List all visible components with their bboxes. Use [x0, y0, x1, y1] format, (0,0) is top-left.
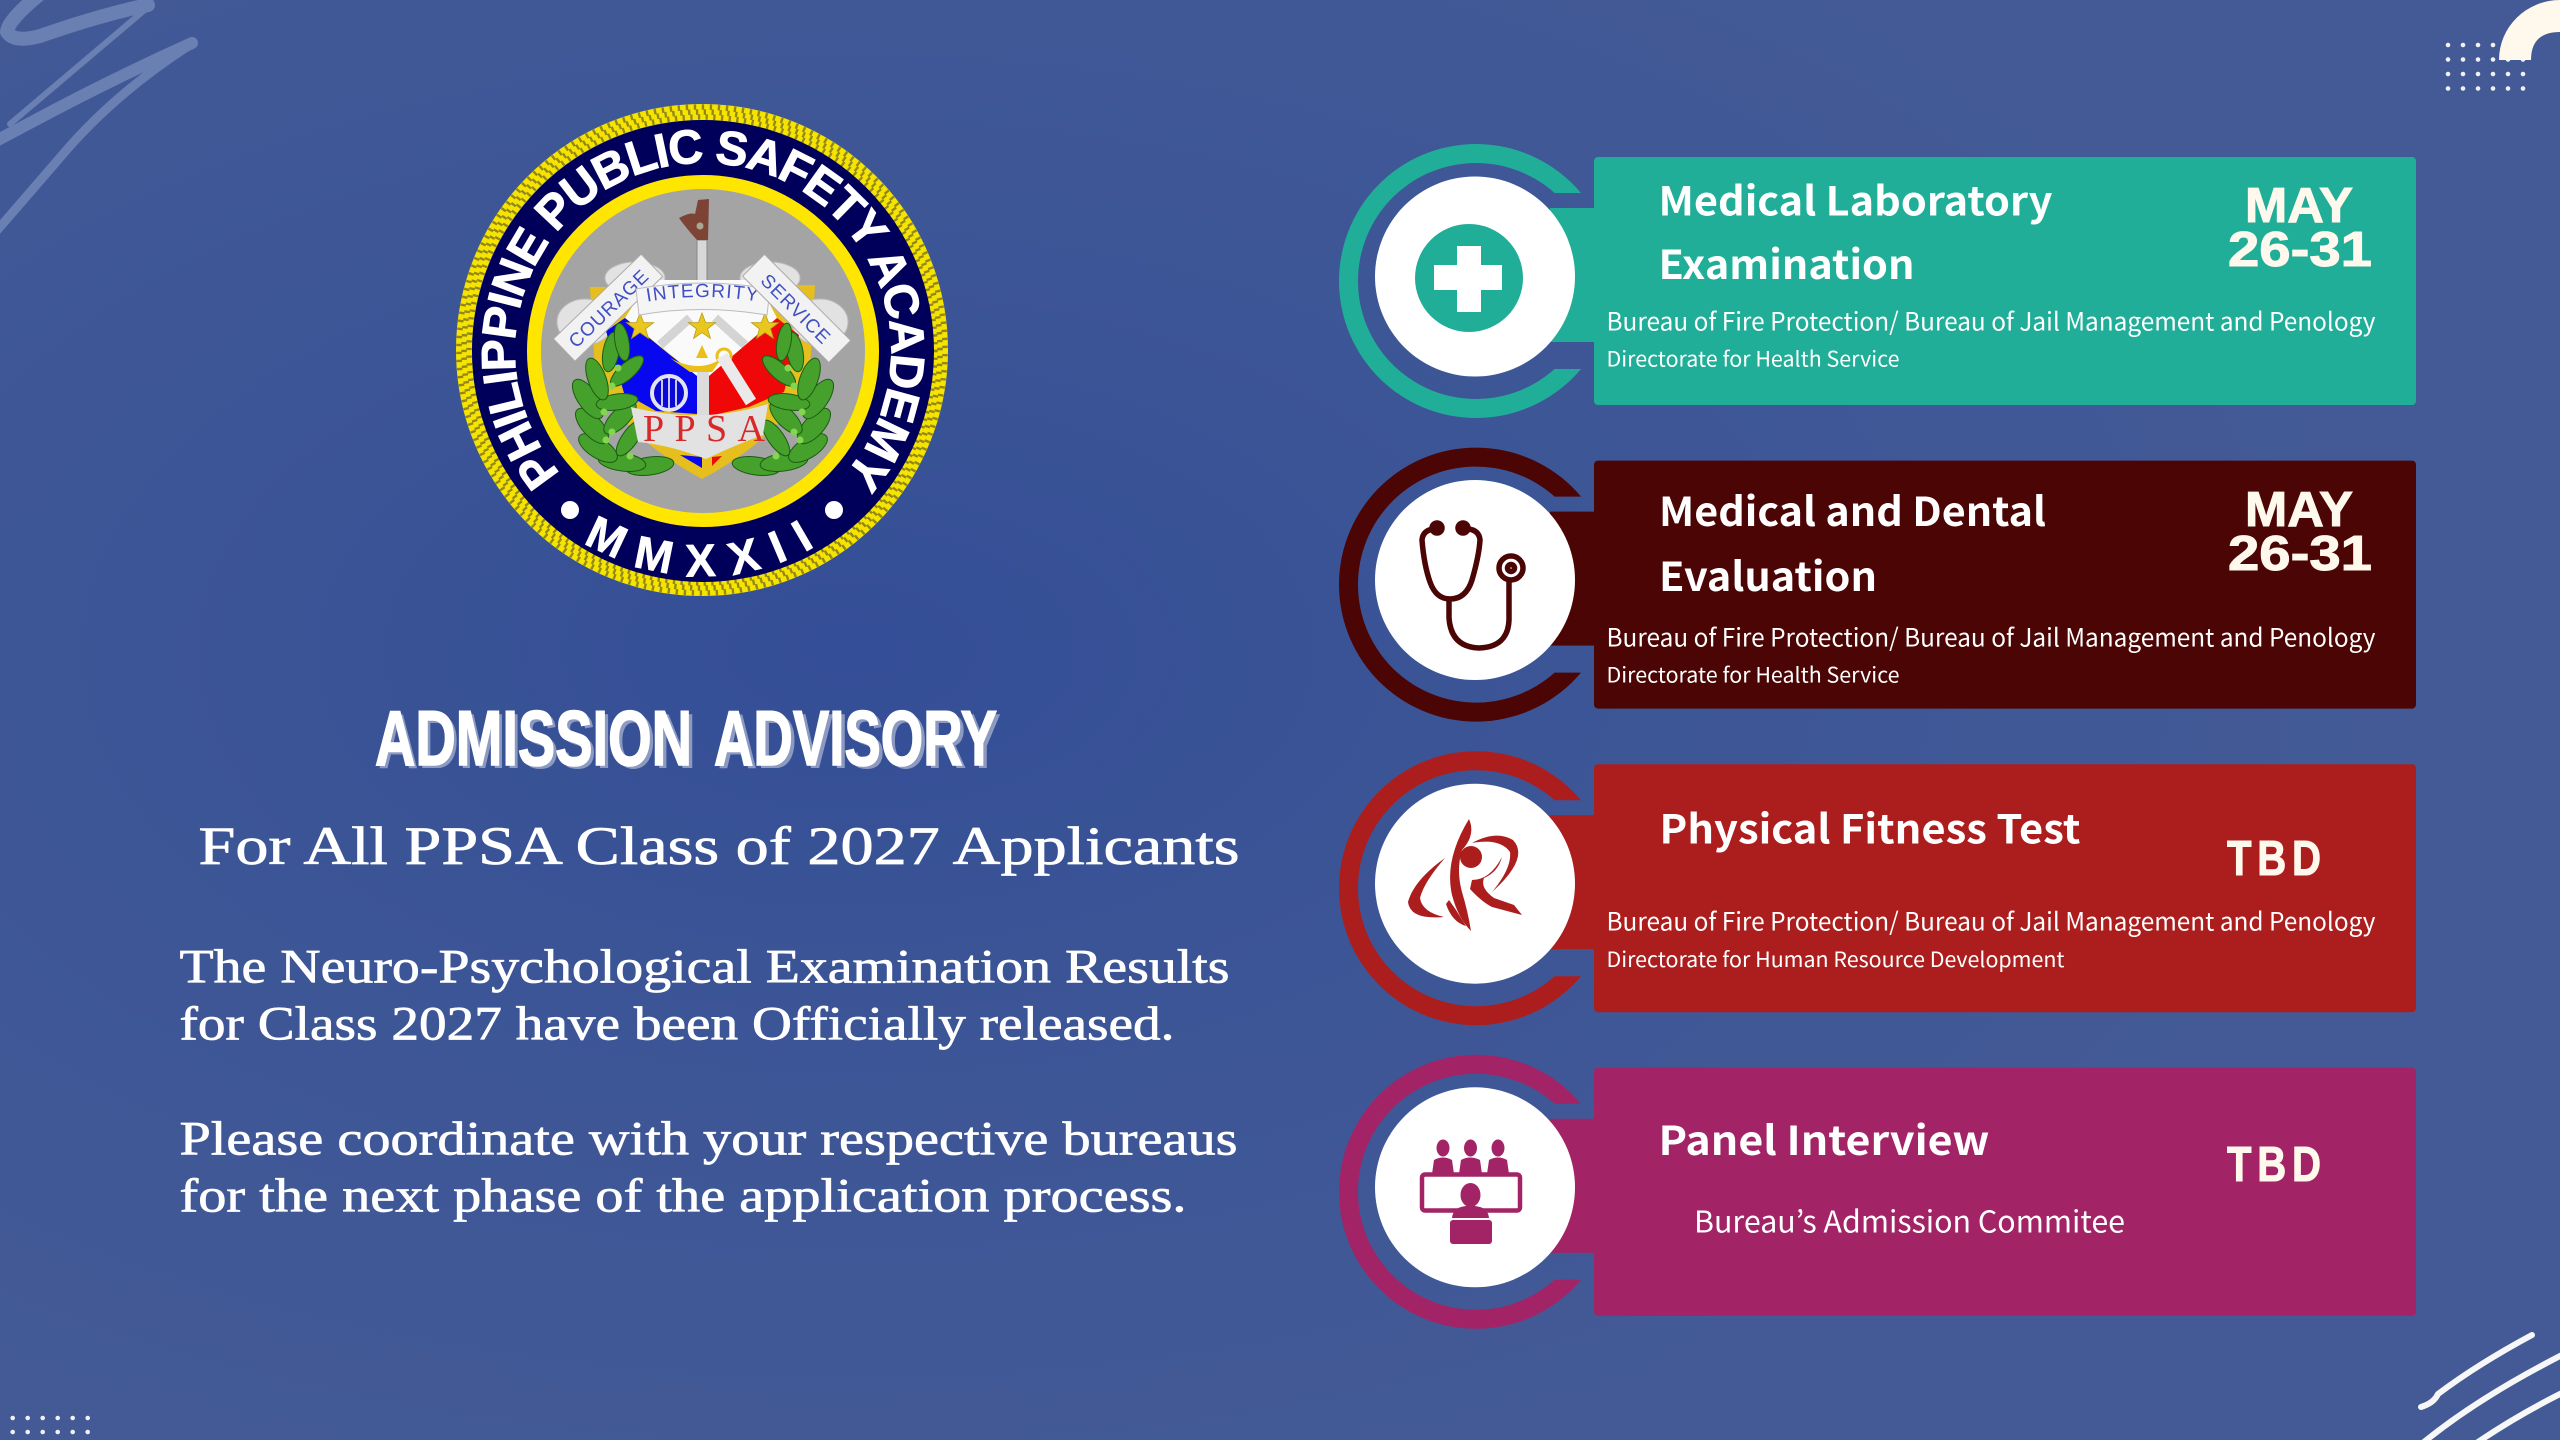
logo: PPSA seal: [456, 104, 948, 596]
icon: stethoscope: [1422, 523, 1523, 648]
heading: admission advisory: ADVISORY: [718, 697, 1001, 785]
date: TBD: [2227, 831, 2327, 886]
icon: gymnast: [1408, 819, 1522, 931]
date: [2228, 179, 2372, 277]
card body: [1550, 461, 2416, 709]
seal bullets: [561, 501, 843, 519]
panel: physical fitness test: [1339, 751, 2416, 1025]
paragraph: next phase: [180, 1112, 1238, 1222]
heading: admission advisory: [375, 694, 1001, 785]
title: Medical and Dental: [1659, 480, 2046, 538]
sword: [697, 240, 707, 290]
title: [1658, 170, 2053, 291]
title: Evaluation: [1659, 545, 1877, 603]
stars: [626, 313, 779, 338]
seal yellow band and grey field: [534, 182, 872, 520]
lamp: [670, 345, 731, 372]
PPSA banner text: PPSA: [643, 408, 766, 450]
date: 26-31: [2228, 527, 2372, 581]
ring: [1339, 144, 1581, 418]
date: 26-31: [2228, 223, 2372, 277]
title: [1659, 480, 2046, 603]
crest: [554, 199, 850, 479]
date: [2228, 483, 2372, 581]
motto ribbon: integrity: INTEGRITY: [646, 284, 757, 302]
white disc: [1375, 480, 1575, 680]
shield backing: [590, 285, 815, 479]
seal top lettering: PHILIPPINE PUBLIC SAFETY ACADEMY: [481, 130, 925, 496]
PPSA banner: [631, 404, 768, 459]
paragraph: next phase: for the next phase of the application process.: [180, 1170, 1186, 1222]
bureaus: Bureau of Fire Protection/ Bureau of Jail Management and Penology: [1606, 902, 2376, 938]
directorate: Directorate for Human Resource Development: [1606, 944, 2065, 974]
bureaus: Bureau of Fire Protection/ Bureau of Jail Management and Penology: [1606, 618, 2376, 654]
diagonal bar: [722, 356, 751, 402]
shield red panel: [709, 318, 799, 416]
title: Examination: [1658, 233, 1914, 291]
decoration: bottom-left dot grid: [13, 1418, 95, 1432]
shield centre bar: [697, 372, 709, 418]
directorate: Directorate for Health Service: [1606, 344, 1900, 374]
icon: medical cross: [1415, 224, 1523, 332]
title: Physical Fitness Test: [1660, 798, 2081, 856]
heading: admission advisory: ADVISORY: [714, 694, 997, 782]
seal bottom lettering: MMXXII: [585, 516, 814, 577]
panel: medical and dental evaluation: [1339, 448, 2416, 722]
motto ribbon: integrity: [636, 282, 769, 316]
heading: admission advisory: ADMISSION: [378, 697, 696, 785]
paragraph: results released: The Neuro-Psychological Examination Results: [180, 940, 1230, 994]
motto ribbon: courage: COURAGE: [565, 266, 654, 352]
paragraph: results released: for Class 2027 have been Officially released.: [180, 998, 1174, 1050]
icon: interview panel: [1422, 1140, 1520, 1244]
shield blue panel: [606, 318, 697, 414]
wreaths: [567, 322, 675, 478]
date: TBD: [2227, 1137, 2327, 1192]
panel: medical laboratory examination: [1339, 144, 2416, 418]
date: MAY: [2245, 483, 2353, 537]
ring: [1339, 1055, 1581, 1329]
motto ribbon: courage: [553, 254, 663, 361]
card body: [1550, 1068, 2416, 1316]
seal rope border: [459, 107, 945, 593]
directorate: Directorate for Health Service: [1606, 660, 1900, 690]
committee: Bureau’s Admission Commitee: [1694, 1198, 2125, 1242]
seal navy ring: [472, 120, 934, 582]
white disc: [1375, 176, 1575, 376]
white disc: [1375, 1087, 1575, 1287]
heading: admission advisory: ADMISSION: [375, 694, 692, 782]
motto ribbon: service: [743, 254, 851, 362]
barred circle: [652, 376, 686, 410]
bureaus: Bureau of Fire Protection/ Bureau of Jail Management and Penology: [1606, 302, 2376, 338]
title: Panel Interview: [1658, 1109, 1990, 1167]
wings: [557, 262, 848, 345]
white disc: [1375, 784, 1575, 984]
decoration: top-right dot grid: [2448, 45, 2530, 88]
panel: panel interview: [1339, 1055, 2416, 1329]
ring: [1339, 448, 1581, 722]
decoration: top-left scribble: [0, 0, 192, 234]
decoration: top-right cream arc: [2499, 0, 2560, 60]
card body: [1550, 157, 2416, 405]
paragraph: next phase: Please coordinate with your respective bureaus: [180, 1112, 1238, 1166]
subheading: For All PPSA Class of 2027 Applicants: [198, 816, 1240, 876]
title: Medical Laboratory: [1658, 170, 2053, 228]
shield white triangle: [625, 280, 777, 376]
card body: [1550, 764, 2416, 1012]
ring: [1339, 751, 1581, 1025]
motto ribbon: service: SERVICE: [756, 270, 835, 349]
date: MAY: [2245, 179, 2353, 233]
paragraph: results released: [180, 940, 1230, 1050]
decoration: bottom-right strokes: [2421, 1335, 2560, 1440]
bottom shield fragments: [680, 455, 702, 468]
